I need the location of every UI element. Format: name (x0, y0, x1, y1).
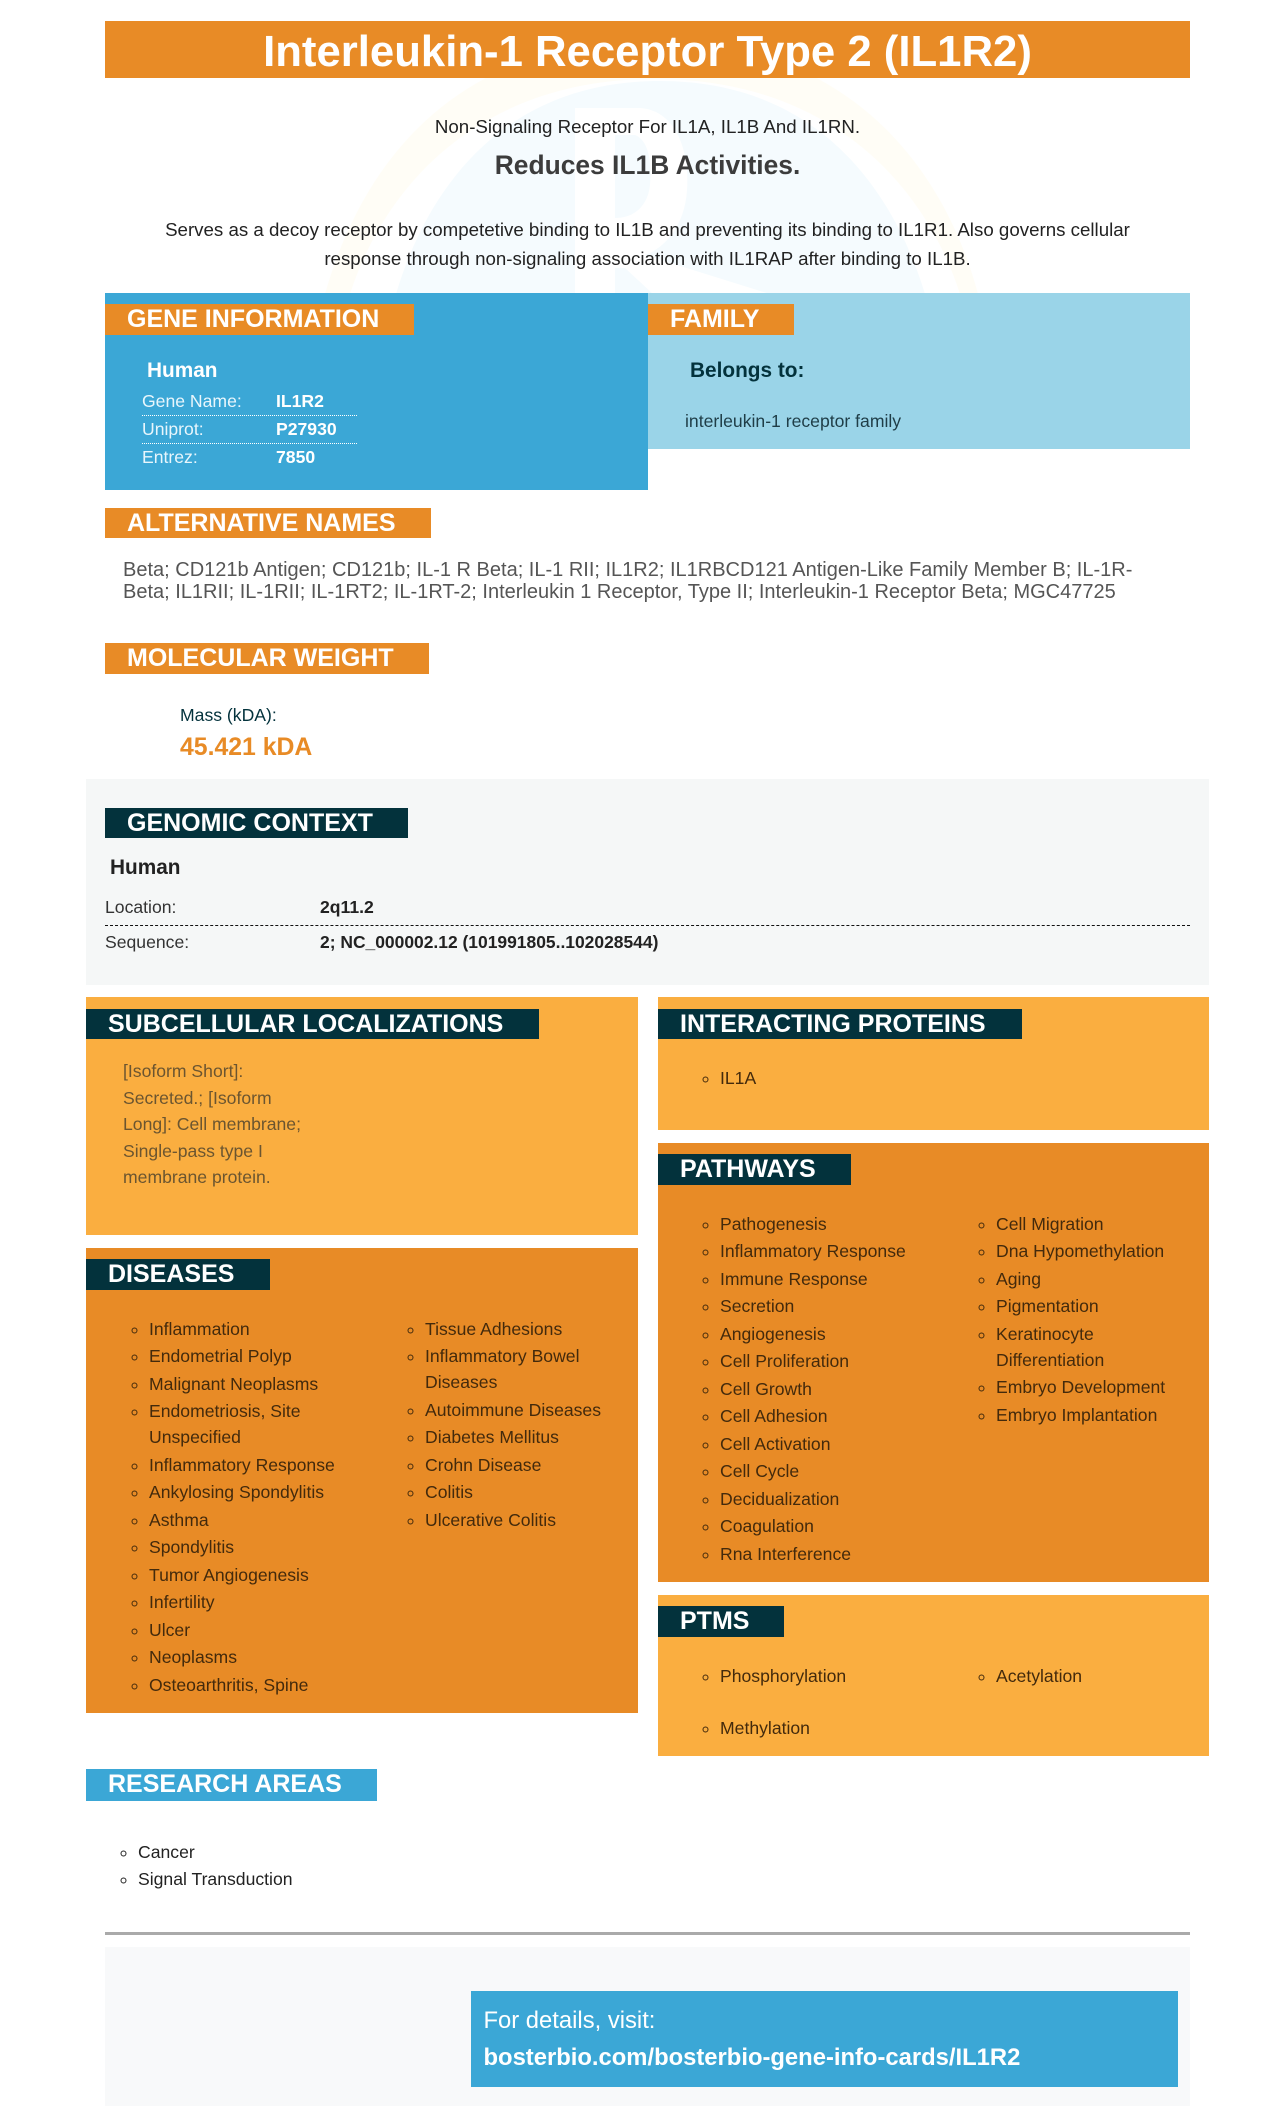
subtitle: Non-Signaling Receptor For IL1A, IL1B And IL1RN. (435, 116, 860, 137)
heading: subcellular localizations: SUBCELLULAR LOCALIZATIONS (108, 1010, 503, 1038)
disease list column 1: Inflammatory Response (149, 1454, 335, 1474)
heading: alternative names: ALTERNATIVE NAMES (127, 509, 396, 537)
heading: genomic context: GENOMIC CONTEXT (127, 809, 373, 837)
panel: interacting proteins (658, 997, 1209, 1130)
description: response through non-signaling association with IL1RAP after binding to IL1B. (324, 248, 971, 269)
pathway list column 2: Dna Hypomethylation (996, 1241, 1164, 1261)
disease list column 1: Inflammation (149, 1318, 250, 1338)
heading: ptms (658, 1606, 784, 1637)
species label: Human (147, 359, 217, 382)
pathway list column 1: Rna Interference (720, 1544, 851, 1564)
pathway list column 1: Cell Cycle (720, 1461, 799, 1481)
pathway list column 1: Cell Proliferation (720, 1351, 849, 1371)
pathway list column 1: Cell Adhesion (720, 1406, 828, 1426)
localization text: Single-pass type I (123, 1140, 263, 1160)
disease list column 1: Malignant Neoplasms (149, 1374, 318, 1394)
heading: gene information: GENE INFORMATION (127, 305, 379, 333)
heading: research areas: RESEARCH AREAS (108, 1770, 342, 1798)
watermark logo (326, 78, 978, 293)
location row: Location: (105, 897, 176, 917)
disease list column 1: Neoplasms (149, 1647, 237, 1667)
pathway list column 2: Differentiation (996, 1350, 1104, 1370)
pathway list column 1: Pathogenesis (720, 1214, 827, 1234)
pathway list column 1: Cell Activation (720, 1434, 831, 1454)
callout: details link (471, 1991, 1178, 2087)
heading: diseases: DISEASES (108, 1260, 234, 1288)
research area list: Cancer (138, 1842, 195, 1862)
sequence row (105, 932, 658, 952)
mass value: 45.421 kDA (180, 734, 312, 761)
title (105, 21, 1190, 78)
disease list column 2: Diseases (425, 1372, 497, 1392)
pathway list column 1: Decidualization (720, 1488, 839, 1508)
panel: diseases (86, 1248, 638, 1713)
disease list column 2: Tissue Adhesions (425, 1318, 562, 1338)
disease list column 1: Endometrial Polyp (149, 1346, 292, 1366)
panel: subcellular localizations (86, 997, 638, 1235)
entrez row: 7850 (276, 447, 315, 467)
family name: interleukin-1 receptor family (685, 411, 901, 431)
heading: family: FAMILY (670, 305, 759, 333)
panel: ptms (658, 1595, 1209, 1756)
alternative names text (123, 559, 1132, 603)
disease list column 1: Spondylitis (149, 1537, 234, 1557)
pathway list column 1: Angiogenesis (720, 1324, 826, 1344)
disease list column 1: Ulcer (149, 1620, 190, 1640)
entrez row: Entrez: (142, 447, 198, 467)
disease list column 1: Osteoarthritis, Spine (149, 1674, 308, 1694)
title: Interleukin-1 Receptor Type 2 (IL1R2) (263, 27, 1032, 76)
pathway list column 2: Embryo Development (996, 1377, 1165, 1397)
gene name row: IL1R2 (276, 391, 324, 411)
uniprot row: P27930 (276, 419, 337, 439)
panel: gene information (105, 293, 648, 490)
disease list column 2: Ulcerative Colitis (425, 1510, 556, 1530)
research area list: Signal Transduction (138, 1869, 293, 1889)
gene name row: Gene Name: (142, 391, 242, 411)
ptm item: phosphorylation: Phosphorylation (720, 1666, 846, 1686)
panel: pathways (658, 1143, 1209, 1582)
pathway list column 2 (978, 1214, 1165, 1424)
localization text: membrane protein. (123, 1167, 271, 1187)
pathway list column 2: Aging (996, 1268, 1041, 1288)
pathway list column 2: Embryo Implantation (996, 1404, 1157, 1424)
heading: diseases (86, 1259, 270, 1290)
ptm item: acetylation: Acetylation (996, 1666, 1082, 1686)
disease list column 1: Asthma (149, 1510, 209, 1530)
heading: pathways: PATHWAYS (680, 1155, 816, 1183)
description (165, 218, 1130, 269)
disease list column 1: Endometriosis, Site (149, 1401, 301, 1421)
location row: 2q11.2 (320, 897, 374, 917)
panel: family (648, 293, 1190, 449)
pathway list column 1: Coagulation (720, 1516, 814, 1536)
disease list column 2: Autoimmune Diseases (425, 1400, 601, 1420)
localization text: [Isoform Short]: (123, 1061, 243, 1081)
mass label: Mass (kDA): (180, 705, 277, 725)
pathway list column 2: Cell Migration (996, 1214, 1104, 1234)
callout label: For details, visit: (484, 2007, 655, 2034)
disease list column 2: Crohn Disease (425, 1454, 541, 1474)
disease list column 1: Unspecified (149, 1427, 241, 1447)
disease list column 1 (132, 1318, 335, 1694)
panel: genomic context (86, 779, 1209, 985)
heading: ptms: PTMS (680, 1607, 749, 1635)
gene name row (142, 388, 357, 416)
sequence row: Sequence: (105, 932, 189, 952)
panel: footer (105, 1947, 1190, 2106)
species label: Human (110, 856, 180, 879)
pathway list column 2: Keratinocyte (996, 1324, 1094, 1344)
disease list column 1: Infertility (149, 1592, 215, 1612)
disease list column 1: Ankylosing Spondylitis (149, 1482, 324, 1502)
callout url: bosterbio.com/bosterbio-gene-info-cards/IL1R2 (484, 2044, 1020, 2071)
uniprot row: Uniprot: (142, 419, 204, 439)
uniprot row (142, 416, 357, 444)
description: Serves as a decoy receptor by competetive binding to IL1B and preventing its binding to IL1R1. Also governs cellular (165, 218, 1130, 240)
localization text: Secreted.; [Isoform (123, 1088, 272, 1108)
entrez row (142, 447, 315, 467)
heading: family (648, 304, 794, 335)
research area list (120, 1842, 293, 1889)
heading: pathways (658, 1154, 851, 1185)
localization text: Long]: Cell membrane; (123, 1114, 301, 1134)
sequence row: 2; NC_000002.12 (101991805..102028544) (320, 932, 658, 952)
disease list column 2: Colitis (425, 1482, 473, 1502)
pathway list column 1: Inflammatory Response (720, 1241, 906, 1261)
divider (105, 1932, 1190, 1935)
location row (105, 894, 1190, 926)
pathway list column 1: Cell Growth (720, 1378, 812, 1398)
belongs to label: Belongs to: (690, 359, 804, 382)
heading: interacting proteins: INTERACTING PROTEINS (680, 1010, 986, 1038)
pathway list column 1 (702, 1214, 906, 1564)
pathway list column 2: Pigmentation (996, 1296, 1099, 1316)
disease list column 2 (408, 1318, 601, 1530)
localization text (123, 1061, 301, 1187)
alternative names text: Beta; IL1RII; IL-1RII; IL-1RT2; IL-1RT-2; Interleukin 1 Receptor, Type II; Interleukin-1 Receptor Beta; MGC47725 (123, 581, 1116, 603)
pathway list column 1: Secretion (720, 1296, 794, 1316)
alternative names text: Beta; CD121b Antigen; CD121b; IL-1 R Beta; IL-1 RII; IL1R2; IL1RBCD121 Antigen-Like Family Member B; IL-1R- (123, 559, 1132, 581)
protein list: IL1A (720, 1068, 756, 1088)
heading: molecular weight: MOLECULAR WEIGHT (127, 644, 394, 672)
disease list column 2: Inflammatory Bowel (425, 1346, 580, 1366)
heading: function: Reduces IL1B Activities. (495, 150, 800, 180)
pathway list column 1: Immune Response (720, 1268, 868, 1288)
disease list column 2: Diabetes Mellitus (425, 1427, 559, 1447)
disease list column 1: Tumor Angiogenesis (149, 1564, 309, 1584)
ptm item: methylation: Methylation (720, 1718, 810, 1738)
